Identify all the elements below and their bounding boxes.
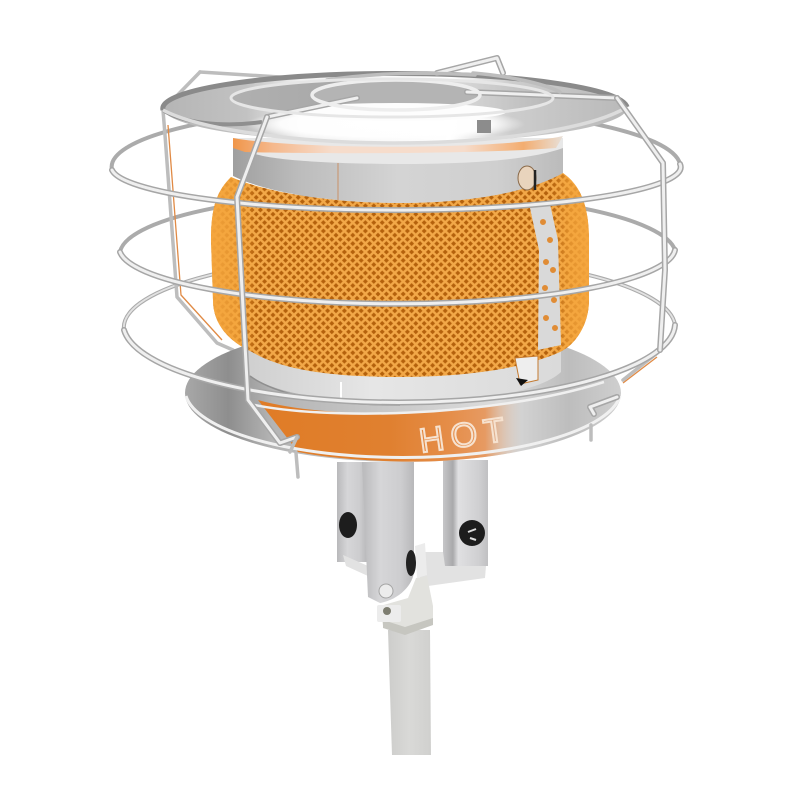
cage top wires	[231, 58, 617, 117]
small bolt	[477, 120, 491, 133]
bracket plate	[343, 552, 486, 586]
seam line	[337, 163, 339, 202]
disc base	[185, 324, 621, 462]
collar	[380, 576, 433, 632]
burner body	[211, 136, 589, 405]
orange reflected glow	[258, 400, 522, 462]
lower disc reflector	[184, 346, 622, 462]
cage rings: front halves	[112, 164, 681, 402]
cage front wires	[237, 98, 665, 477]
highlight	[245, 107, 525, 141]
inner dish	[231, 79, 553, 117]
upper clamp screw	[518, 166, 536, 190]
left rear tube	[337, 462, 367, 562]
lower metal band	[246, 340, 561, 403]
perforated strap	[530, 204, 561, 350]
front tube	[362, 462, 414, 603]
band base lines	[250, 376, 400, 405]
pale disc line under lower ring	[250, 382, 604, 414]
disc dish	[163, 73, 627, 143]
pole and mounting bracket	[337, 460, 488, 755]
support post	[388, 630, 431, 755]
cage rear wires	[163, 72, 661, 383]
cage rings: rear halves	[112, 107, 680, 330]
top disc	[163, 73, 627, 143]
HOT embossed text: HOT	[417, 410, 514, 461]
right tube	[443, 460, 488, 566]
lower clamp screw	[515, 356, 538, 386]
disc front rim	[186, 396, 620, 457]
screws	[383, 607, 391, 615]
upper metal band	[233, 138, 563, 203]
illustration: orange mesh heater on a pole	[109, 55, 684, 755]
orange mesh burner	[211, 173, 589, 377]
dish rim	[163, 73, 627, 110]
